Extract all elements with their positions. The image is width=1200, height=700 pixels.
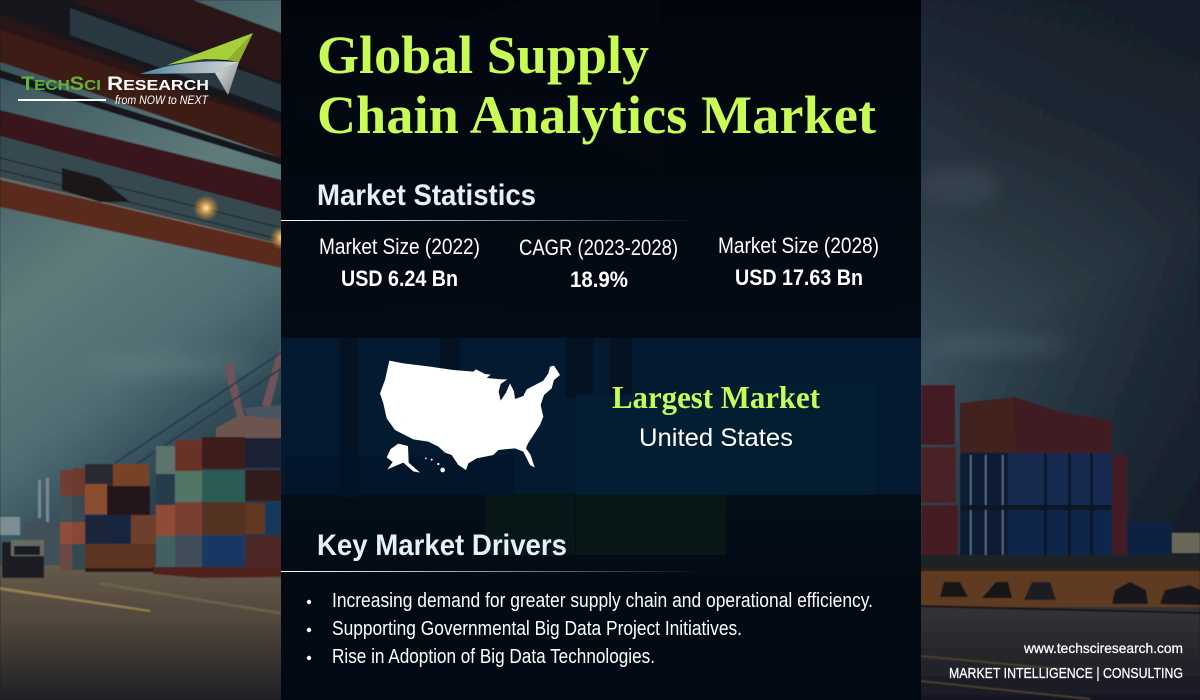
callout: largest market: Largest Market [612, 379, 820, 415]
logo wordmark: RESEARCH [107, 74, 209, 95]
center dark panel [281, 0, 921, 700]
stat: CAGR [519, 235, 678, 292]
list: key market drivers: Rise in Adoption of Big Data Technologies. [332, 646, 655, 668]
callout: largest market: United States [639, 424, 793, 452]
stat: market size 2022 [319, 234, 480, 291]
logo mark: paper plane [140, 33, 253, 95]
stat: CAGR: 18.9% [570, 267, 628, 292]
title [317, 25, 876, 145]
heading: market statistics: Market Statistics [317, 179, 536, 212]
stat: market size 2028 [718, 233, 879, 290]
background photo: right containers and sky [920, 0, 1200, 700]
list: key market drivers [307, 590, 873, 668]
heading: key market drivers: Key Market Drivers [317, 529, 567, 562]
logo wordmark: TECHSCI [21, 74, 101, 95]
list: key market drivers: Increasing demand for greater supply chain and operational efficiency. [332, 590, 873, 612]
stat: market size 2028: Market Size (2028) [718, 233, 879, 258]
logo wordmark [21, 74, 209, 95]
title: Global Supply [317, 25, 649, 85]
icon: United States map [380, 361, 560, 473]
logo underline [18, 99, 106, 101]
stat: market size 2028: USD 17.63 Bn [735, 265, 863, 290]
footer: website and tagline: www.techsciresearch.com [1023, 640, 1183, 656]
stat: market size 2022: Market Size (2022) [319, 234, 480, 259]
stat: CAGR: CAGR (2023-2028) [519, 235, 678, 260]
footer: website and tagline [949, 640, 1183, 682]
logo tagline: from NOW to NEXT [115, 93, 209, 107]
stat: market size 2022: USD 6.24 Bn [341, 266, 458, 291]
background photo: left port and crane scene [0, 0, 294, 700]
logo: TechSci Research [18, 33, 253, 107]
title: Chain Analytics Market [317, 85, 876, 145]
callout: largest market [612, 379, 820, 452]
list: key market drivers: Supporting Governmental Big Data Project Initiatives. [332, 618, 742, 640]
